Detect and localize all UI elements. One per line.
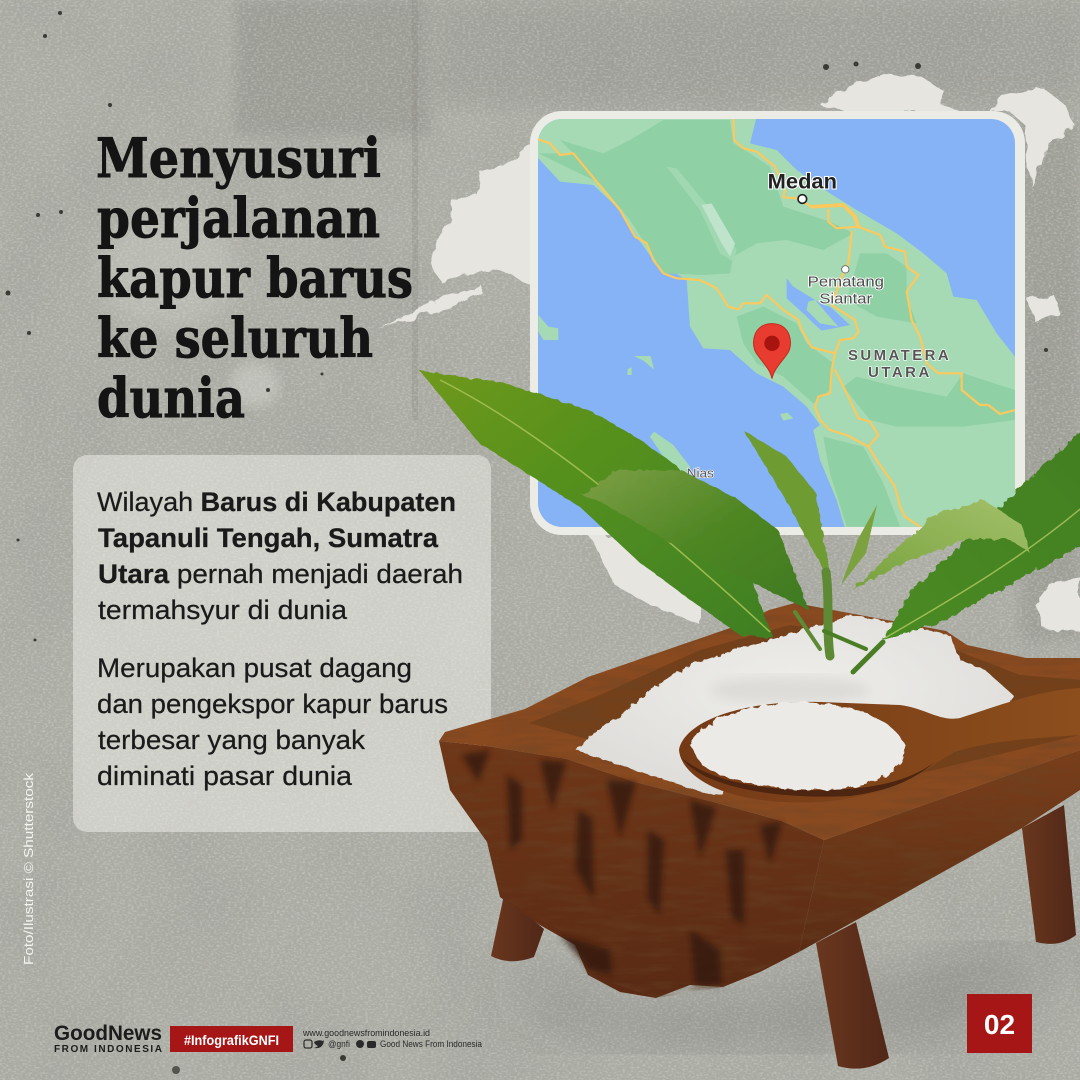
label: Pematang Siantar [808,266,884,307]
hashtag badge: #InfografikGNFI [184,1032,279,1048]
main heading: kapur barus [97,246,413,310]
left large leaf [420,371,773,638]
right big leaf [883,427,1080,640]
icon: instagram [304,1040,312,1048]
plant with leaves [420,371,1080,672]
map of North Sumatra [530,110,1030,540]
footer logo GoodNews: GoodNews [54,1021,162,1045]
main heading: dunia [97,366,245,430]
paragraph 2: Merupakan pusat dagang [97,653,412,683]
label: Sumatera Utara [848,349,950,378]
land mass [530,110,1030,540]
footer logo GoodNews [54,1021,162,1055]
wooden tray with camphor [430,600,1080,1069]
camphor salt pile [576,615,1013,796]
paragraph 1 [97,487,463,625]
footer website and social links: www.goodnewsfromindonesia.id [302,1028,430,1039]
paragraph 1: Wilayah Barus di Kabupaten [97,487,456,517]
tray body [430,600,1080,1000]
label: Pematang Siantar: Pematang [808,275,884,291]
label: Medan [768,170,837,203]
islands [538,315,793,478]
light leaf, underside [582,470,809,610]
footer website and social links: Good News From Indonesia [380,1039,482,1049]
roads [538,119,1015,527]
paragraph 2: terbesar yang banyak [98,725,366,755]
paragraph 2: dan pengekspor kapur barus [97,689,448,719]
river valley stripe [667,167,737,262]
label: Sumatera Utara: UTARA [868,364,930,381]
paragraph 1: Tapanuli Tengah, Sumatra [98,523,439,553]
icon: red location pin [754,324,790,379]
main heading: Menyusuri [96,126,381,190]
label: Nias: Nias [687,465,714,480]
icon: youtube [367,1041,376,1048]
paragraph 1: Utara pernah menjadi daerah [98,559,463,589]
small centre leaf [841,505,877,585]
main heading [96,126,413,430]
paragraph 2 [97,653,448,791]
footer website and social links: @gnfi [328,1039,350,1049]
world map splashes in white paint [378,74,1080,632]
stem [795,572,883,672]
page number badge: 02 [984,1009,1015,1040]
right light leaf [853,500,1030,590]
paragraph 2: diminati pasar dunia [97,761,353,791]
label: Pematang Siantar: Siantar [819,291,872,307]
label: Sumatera Utara: SUMATERA [848,347,949,364]
floor shadow under the tray [500,950,1060,1045]
narrow centre leaf [744,431,830,576]
tray back leg [1022,805,1076,944]
icon: facebook [356,1040,364,1048]
main heading: ke seluruh [97,306,373,370]
wooden spoon with salt [679,688,1080,803]
footer website and social links [302,1028,482,1049]
main heading: perjalanan [97,186,380,250]
darker terrain [538,120,1015,527]
Lake Toba [787,278,850,331]
carved notches on tray [462,750,782,985]
footer logo GoodNews: FROM INDONESIA [54,1044,162,1055]
map frame [530,111,1025,535]
paragraph 1: termahsyur di dunia [98,595,348,625]
tray left leg [491,895,544,961]
label: Medan: Medan [768,170,837,193]
photo credit: Foto/Ilustrasi © Shutterstock [21,772,36,965]
hashtag badge [170,1026,293,1052]
tray front leg [816,922,889,1069]
panel: description text [73,455,491,832]
icon: twitter [314,1040,324,1048]
page number badge [967,994,1032,1053]
